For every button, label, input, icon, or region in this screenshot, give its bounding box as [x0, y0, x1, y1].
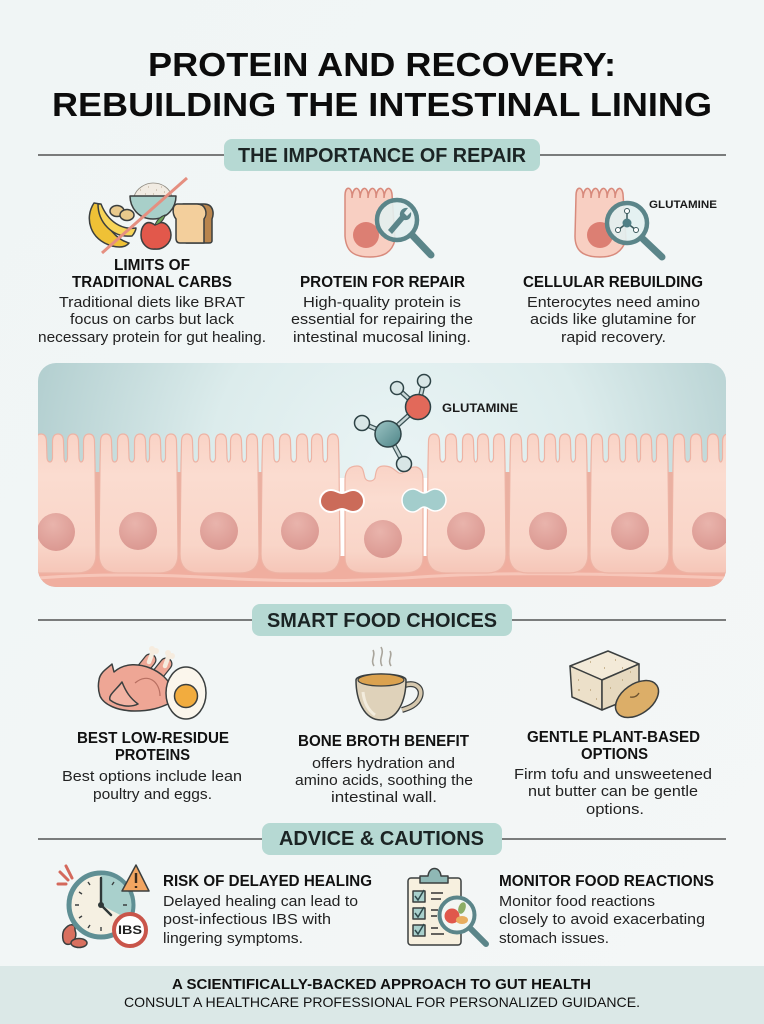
section heading: the importance of repair [224, 139, 540, 171]
panel: protein for repair: essential for repairing the [291, 311, 473, 328]
panel: cellular rebuilding: Enterocytes need amino [527, 294, 700, 311]
panel: bone broth benefit: amino acids, soothing the [295, 772, 473, 789]
panel: cellular rebuilding [523, 188, 717, 346]
panel: risk of delayed healing: Delayed healing can lead to [163, 893, 358, 910]
title: PROTEIN AND RECOVERY: [148, 46, 616, 83]
icon: clock, warning and IBS badge [58, 865, 149, 948]
panel: cellular rebuilding: CELLULAR REBUILDING [523, 274, 703, 291]
icon: chicken and egg [98, 646, 206, 719]
panel: gentle plant-based options: GENTLE PLANT-BASED [527, 729, 700, 746]
label: glutamine small: GLUTAMINE [649, 199, 717, 211]
panel: best low-residue proteins: BEST LOW-RESIDUE [77, 730, 229, 747]
panel: bone broth benefit: intestinal wall. [331, 789, 437, 806]
section heading: smart food choices [252, 604, 512, 636]
title: REBUILDING THE INTESTINAL LINING [52, 86, 712, 123]
icon: clock, warning and IBS badge: IBS [118, 923, 142, 937]
icon: clipboard and magnifier [408, 868, 486, 945]
panel: protein for repair: High-quality protein is [303, 294, 461, 311]
label: glutamine: GLUTAMINE [442, 401, 518, 415]
molecule: glutamine [354, 374, 430, 472]
panel: bone broth benefit: offers hydration and [312, 755, 455, 772]
panel: best low-residue proteins [62, 646, 242, 803]
panel: risk of delayed healing: RISK OF DELAYED HEALING [163, 873, 372, 890]
panel: cellular rebuilding: rapid recovery. [561, 329, 666, 346]
panel: gentle plant-based options [514, 651, 712, 818]
illustration: intestinal lining with glutamine [17, 363, 751, 587]
icon: cell with wrench magnifier [345, 188, 431, 257]
icon: carbs crossed out [89, 178, 213, 253]
icon: cell with glutamine magnifier [575, 188, 662, 257]
panel: limits of traditional carbs: TRADITIONAL CARBS [72, 274, 232, 291]
panel: gentle plant-based options: options. [586, 801, 644, 818]
panel: bone broth benefit: BONE BROTH BENEFIT [298, 733, 470, 750]
panel: gentle plant-based options: nut butter can be gentle [528, 783, 698, 800]
connector: red junction [320, 490, 364, 512]
section heading: advice and cautions [262, 823, 502, 855]
footer band [0, 966, 764, 1024]
panel: monitor food reactions [408, 868, 714, 947]
panel: best low-residue proteins: PROTEINS [115, 747, 190, 764]
panel: gentle plant-based options: Firm tofu and unsweetened [514, 766, 712, 783]
panel: limits of traditional carbs: Traditional diets like BRAT [59, 294, 245, 311]
panel: limits of traditional carbs: necessary protein for gut healing. [38, 329, 266, 346]
section heading: the importance of repair: THE IMPORTANCE OF REPAIR [238, 145, 527, 167]
icon: tofu and bean [570, 651, 665, 725]
section heading: smart food choices: SMART FOOD CHOICES [267, 610, 497, 632]
panel: monitor food reactions: MONITOR FOOD REACTIONS [499, 873, 714, 890]
title [52, 46, 712, 123]
panel: monitor food reactions: closely to avoid exacerbating [499, 911, 705, 928]
panel: protein for repair: PROTEIN FOR REPAIR [300, 274, 465, 291]
panel: limits of traditional carbs [38, 178, 266, 346]
section heading: advice and cautions: ADVICE & CAUTIONS [279, 828, 484, 850]
panel: monitor food reactions: stomach issues. [499, 930, 609, 947]
panel: gentle plant-based options: OPTIONS [581, 746, 648, 763]
footer band: A SCIENTIFICALLY-BACKED APPROACH TO GUT HEALTH [172, 977, 591, 993]
icon: cup of bone broth [356, 647, 421, 720]
connector: teal junction [402, 489, 446, 512]
panel: risk of delayed healing: post-infectious IBS with [163, 911, 331, 928]
panel: protein for repair: intestinal mucosal lining. [293, 329, 471, 346]
panel: best low-residue proteins: Best options include lean [62, 768, 242, 785]
panel: risk of delayed healing: lingering symptoms. [163, 930, 303, 947]
panel: limits of traditional carbs: focus on carbs but lack [70, 311, 235, 328]
panel: best low-residue proteins: poultry and eggs. [93, 786, 212, 803]
panel: risk of delayed healing [58, 865, 372, 948]
panel: limits of traditional carbs: LIMITS OF [114, 257, 190, 274]
panel: protein for repair [291, 188, 473, 346]
panel: cellular rebuilding: acids like glutamine for [530, 311, 696, 328]
footer band: CONSULT A HEALTHCARE PROFESSIONAL FOR PERSONALIZED GUIDANCE. [124, 994, 640, 1010]
panel: monitor food reactions: Monitor food reactions [499, 893, 655, 910]
panel: bone broth benefit [295, 647, 473, 806]
